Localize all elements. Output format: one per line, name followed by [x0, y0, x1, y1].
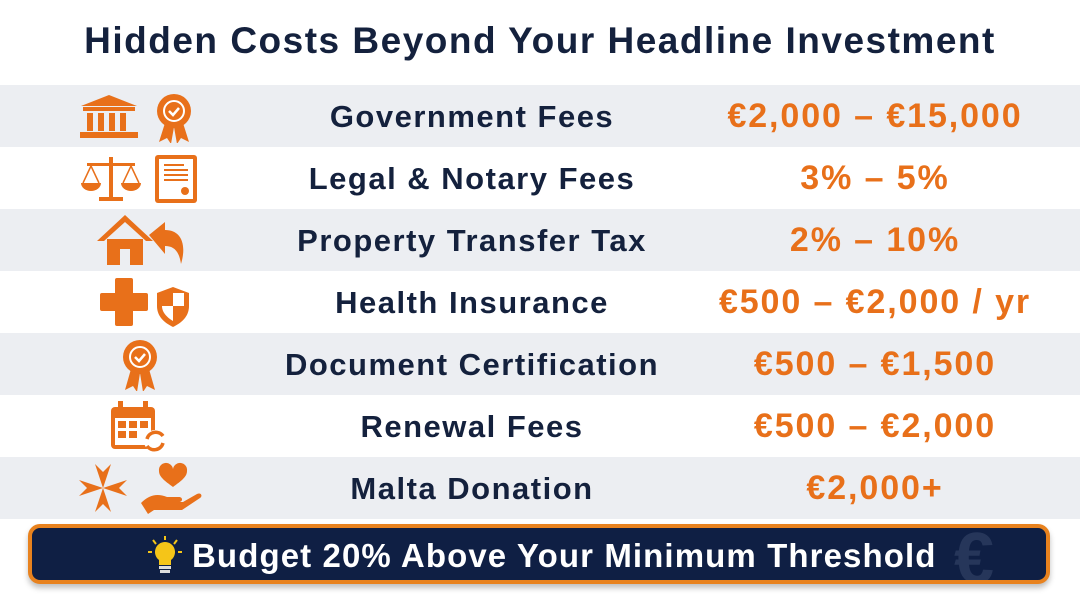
row: legal	[81, 155, 950, 203]
value: 2% – 10%	[790, 221, 960, 259]
label: Renewal Fees	[360, 409, 584, 444]
icon: scales and document	[81, 155, 197, 203]
row: document certification	[0, 333, 1080, 395]
value: €2,000+	[806, 469, 944, 507]
banner text: Budget 20% Above Your Minimum Threshold	[192, 537, 937, 574]
icon: award	[123, 340, 157, 391]
label: Property Transfer Tax	[297, 223, 647, 258]
label: Document Certification	[285, 347, 659, 382]
row: health insurance	[100, 278, 1031, 327]
value: €500 – €2,000 / yr	[719, 283, 1031, 321]
value: €2,000 – €15,000	[727, 97, 1023, 135]
title: Hidden Costs Beyond Your Headline Investment	[84, 20, 996, 61]
value: €500 – €1,500	[754, 345, 996, 383]
label: Health Insurance	[335, 285, 609, 320]
icon: calendar refresh	[111, 401, 165, 452]
row: renewal	[111, 401, 996, 452]
icon: house and arrow	[97, 215, 184, 265]
row: government fees	[0, 85, 1080, 147]
callout banner	[28, 524, 1050, 584]
label: Malta Donation	[350, 471, 594, 506]
icon: maltese cross and heart hand	[79, 462, 202, 514]
icon: light bulb	[148, 536, 182, 573]
icon: bank and award	[80, 94, 191, 143]
icon: cross and shield	[100, 278, 189, 327]
row: property transfer	[0, 209, 1080, 271]
label: Government Fees	[330, 99, 614, 134]
row: malta donation	[0, 457, 1080, 519]
label: Legal & Notary Fees	[309, 161, 635, 196]
value: 3% – 5%	[800, 159, 950, 197]
value: €500 – €2,000	[754, 407, 996, 445]
